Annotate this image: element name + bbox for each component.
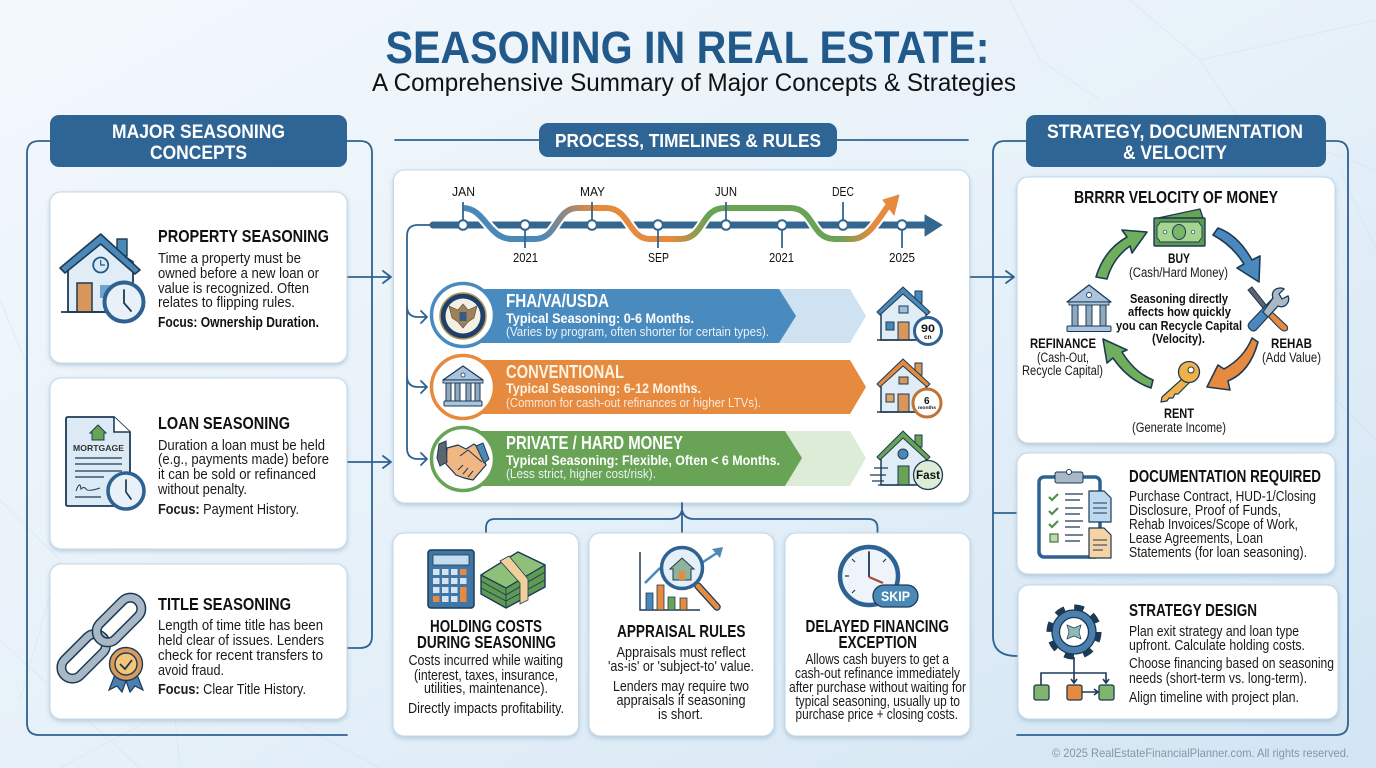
heading: process, timelines and rules: PROCESS, TIMELINES & RULES bbox=[555, 130, 821, 151]
text: property seasoning description: Focus: Ownership Duration. bbox=[158, 315, 319, 331]
text: velocity note: affects how quickly bbox=[1128, 304, 1232, 319]
row: FHA/VA/USDA bbox=[432, 284, 942, 346]
panel: property seasoning bbox=[50, 192, 347, 363]
text: loan seasoning description: without penalty. bbox=[157, 482, 247, 498]
heading: major seasoning concepts bbox=[50, 115, 347, 167]
icon: clock with skip badge: SKIP bbox=[881, 588, 910, 604]
heading: major seasoning concepts: CONCEPTS bbox=[150, 142, 247, 164]
arrow: refinance to buy bbox=[1096, 230, 1147, 279]
text: property seasoning description bbox=[158, 251, 319, 331]
text: documentation list: Lease Agreements, Loan bbox=[1129, 531, 1263, 547]
text: loan seasoning description: it can be sold or refinanced bbox=[158, 467, 316, 483]
text: loan seasoning description: Duration a loan must be held bbox=[158, 438, 325, 454]
icon: house with fast badge: Fast bbox=[916, 470, 940, 482]
text: loan seasoning description bbox=[157, 438, 329, 518]
text: delayed financing description bbox=[789, 652, 966, 723]
center header rule bbox=[395, 139, 968, 141]
row: conventional: Typical Seasoning: 6-12 Months. bbox=[506, 380, 701, 396]
text: property seasoning description: relates to flipping rules. bbox=[158, 295, 295, 311]
label: rent: RENT bbox=[1164, 405, 1194, 421]
text: title seasoning description: Length of time title has been bbox=[158, 618, 323, 634]
panel: holding costs: HOLDING COSTS bbox=[430, 616, 542, 636]
panel: appraisal rules: APPRAISAL RULES bbox=[617, 621, 746, 641]
text: strategy list: Align timeline with project plan. bbox=[1129, 690, 1299, 706]
panel: delayed financing exception: EXCEPTION bbox=[838, 632, 917, 652]
chart: seasoning timeline: 2025 bbox=[889, 251, 915, 265]
text: title seasoning description: held clear of issues. Lenders bbox=[158, 633, 324, 649]
panel: loan seasoning bbox=[50, 378, 347, 549]
text: appraisal rules description: is short. bbox=[658, 707, 703, 723]
chart: seasoning timeline: 2021 bbox=[769, 251, 794, 265]
panel: strategy design bbox=[1018, 585, 1338, 719]
panel: BRRRR velocity of money: BRRRR VELOCITY OF MONEY bbox=[1074, 187, 1278, 207]
chart: seasoning timeline bbox=[433, 185, 942, 265]
text: property seasoning description: value is recognized. Often bbox=[158, 281, 309, 297]
row: FHA/VA/USDA: FHA/VA/USDA bbox=[506, 291, 609, 311]
icon: house with 90-day badge: cn bbox=[924, 334, 932, 341]
label: refinance bbox=[1022, 335, 1103, 378]
icon: bank (refinance) bbox=[1067, 285, 1111, 332]
label: buy bbox=[1129, 250, 1228, 280]
icon: house with clock bbox=[60, 234, 144, 322]
text: loan seasoning description: Focus: Payment History. bbox=[158, 502, 299, 518]
icon: tools (rehab) bbox=[1248, 287, 1289, 331]
text: documentation list: Rehab Invoices/Scope of Work, bbox=[1129, 517, 1298, 533]
text: holding costs description bbox=[408, 653, 564, 717]
row: FHA/VA/USDA: (Varies by program, often shorter for certain types). bbox=[506, 324, 769, 339]
chart: seasoning timeline: JAN bbox=[452, 185, 475, 199]
panel: BRRRR velocity of money bbox=[1017, 177, 1335, 443]
arrow: rent to refinance bbox=[1103, 339, 1153, 388]
icon: house with fast badge bbox=[870, 431, 942, 490]
text: documentation list: Disclosure, Proof of Funds, bbox=[1129, 503, 1281, 519]
text: loan seasoning description: (e.g., payments made) before bbox=[158, 452, 329, 468]
panel: documentation required bbox=[1017, 453, 1335, 574]
row: conventional: CONVENTIONAL bbox=[506, 362, 624, 382]
heading: strategy, documentation and velocity: STRATEGY, DOCUMENTATION bbox=[1047, 121, 1303, 143]
text: documentation list: Purchase Contract, HUD-1/Closing bbox=[1129, 489, 1316, 505]
connector: timeline to loan rows bbox=[407, 225, 433, 465]
panel: property seasoning: PROPERTY SEASONING bbox=[158, 226, 329, 246]
text: title seasoning description: check for recent transfers to bbox=[158, 648, 323, 664]
text: title seasoning description bbox=[158, 618, 324, 698]
text: property seasoning description: owned before a new loan or bbox=[158, 266, 319, 282]
panel: title seasoning: TITLE SEASONING bbox=[158, 594, 291, 614]
text: appraisal rules description bbox=[608, 645, 754, 723]
label: refinance: (Cash-Out, bbox=[1037, 350, 1089, 365]
icon: calculator and cash bbox=[428, 550, 545, 608]
label: rehab: (Add Value) bbox=[1262, 350, 1321, 365]
label: refinance: REFINANCE bbox=[1030, 335, 1096, 351]
chart: seasoning timeline: DEC bbox=[832, 185, 854, 199]
icon: chain links with medal bbox=[57, 593, 146, 692]
text: title seasoning description: Focus: Clear Title History. bbox=[158, 682, 306, 698]
row: conventional: (Common for cash-out refinances or higher LTVs). bbox=[506, 395, 761, 410]
icon: clipboard and documents bbox=[1039, 470, 1111, 558]
text: velocity note bbox=[1116, 291, 1242, 346]
icon: clock with skip badge bbox=[840, 547, 918, 607]
connector: process to bottom cards bbox=[486, 503, 878, 533]
text: strategy list: Plan exit strategy and loan type bbox=[1129, 624, 1299, 640]
row: private / hard money: PRIVATE / HARD MONEY bbox=[506, 433, 683, 453]
text: velocity note: (Velocity). bbox=[1152, 331, 1205, 346]
panel: holding costs bbox=[393, 533, 578, 736]
icon: handshake bbox=[437, 441, 489, 480]
footer copyright: © 2025 RealEstateFinancialPlanner.com. All rights reserved. bbox=[1052, 746, 1349, 760]
icon: house with 6-month badge bbox=[877, 359, 941, 417]
panel: delayed financing exception: DELAYED FINANCING bbox=[806, 616, 949, 636]
row: FHA/VA/USDA: Typical Seasoning: 0-6 Months. bbox=[506, 310, 694, 326]
icon: magnifier over bar chart bbox=[640, 547, 723, 610]
heading: strategy, documentation and velocity: & VELOCITY bbox=[1123, 142, 1227, 164]
panel: title seasoning bbox=[50, 564, 347, 719]
text: strategy list: needs (short-term vs. long-term). bbox=[1129, 671, 1307, 687]
arrow: rehab to rent bbox=[1207, 338, 1258, 390]
connector arrow: process to strategy bbox=[970, 271, 1014, 283]
text: appraisal rules description: appraisals if seasoning bbox=[616, 693, 746, 709]
icon: government seal bbox=[440, 293, 486, 339]
text: velocity note: Seasoning directly bbox=[1130, 291, 1229, 306]
connector arrow: property seasoning to process bbox=[347, 271, 391, 283]
panel: holding costs: DURING SEASONING bbox=[417, 632, 556, 652]
label: rehab: REHAB bbox=[1271, 335, 1312, 351]
row: private / hard money: (Less strict, higher cost/risk). bbox=[506, 466, 656, 481]
connector lines: right column frame bbox=[993, 141, 1348, 735]
text: strategy list bbox=[1129, 624, 1334, 706]
icon: mortgage document with clock: MORTGAGE bbox=[73, 443, 124, 453]
icon: gear and flow chart bbox=[1034, 608, 1114, 700]
heading: major seasoning concepts: MAJOR SEASONING bbox=[112, 121, 285, 143]
text: holding costs description: Directly impacts profitability. bbox=[408, 701, 564, 717]
subtitle: A Comprehensive Summary of Major Concepts & Strategies bbox=[372, 69, 1016, 97]
row: private / hard money bbox=[432, 428, 942, 490]
icon: bank bbox=[443, 366, 483, 406]
panel: loan seasoning: LOAN SEASONING bbox=[158, 413, 290, 433]
text: appraisal rules description: 'as-is' or 'subject-to' value. bbox=[608, 659, 754, 675]
label: buy: (Cash/Hard Money) bbox=[1129, 265, 1228, 280]
icon: key (rent) bbox=[1161, 362, 1200, 402]
title: SEASONING IN REAL ESTATE: bbox=[386, 22, 990, 73]
heading: strategy, documentation and velocity bbox=[1026, 115, 1326, 167]
text: delayed financing description: Allows cash buyers to get a bbox=[806, 652, 950, 668]
icon: cash (buy) bbox=[1154, 209, 1205, 246]
chart: seasoning timeline: MAY bbox=[580, 185, 606, 199]
text: documentation list: Statements (for loan seasoning). bbox=[1129, 545, 1307, 561]
text: appraisal rules description: Lenders may require two bbox=[613, 679, 749, 695]
text: strategy list: upfront. Calculate holding costs. bbox=[1129, 638, 1305, 654]
text: holding costs description: (interest, taxes, insurance, bbox=[414, 668, 558, 684]
text: delayed financing description: cash-out refinance immediately bbox=[795, 666, 961, 682]
label: buy: BUY bbox=[1168, 250, 1190, 266]
icon: house with 6-month badge: 6 bbox=[924, 396, 930, 407]
label: rent bbox=[1132, 405, 1226, 435]
chart: seasoning timeline: 2021 bbox=[513, 251, 538, 265]
text: property seasoning description: Time a property must be bbox=[158, 251, 301, 267]
text: holding costs description: utilities, maintenance). bbox=[424, 681, 548, 697]
text: holding costs description: Costs incurred while waiting bbox=[408, 653, 563, 669]
panel: timeline and loan types bbox=[394, 170, 970, 503]
connector arrow: loan seasoning to process bbox=[347, 456, 391, 468]
icon: mortgage document with clock bbox=[66, 417, 144, 509]
text: documentation list bbox=[1129, 489, 1316, 561]
text: velocity note: you can Recycle Capital bbox=[1116, 318, 1242, 333]
text: delayed financing description: purchase price + closing costs. bbox=[796, 707, 958, 723]
icon: house with 90-day badge: 90 bbox=[921, 323, 935, 335]
panel: appraisal rules bbox=[589, 533, 774, 736]
chart: seasoning timeline: JUN bbox=[715, 185, 737, 199]
icon: house with 6-month badge: months bbox=[918, 405, 937, 410]
row: private / hard money: Typical Seasoning: Flexible, Often < 6 Months. bbox=[506, 452, 780, 468]
panel: delayed financing exception bbox=[785, 533, 970, 736]
label: refinance: Recycle Capital) bbox=[1022, 363, 1103, 378]
icon: house with 90-day badge bbox=[877, 287, 942, 344]
panel: strategy design: STRATEGY DESIGN bbox=[1129, 600, 1257, 620]
panel: documentation required: DOCUMENTATION REQUIRED bbox=[1129, 466, 1321, 486]
text: delayed financing description: typical seasoning, usually up to bbox=[796, 694, 960, 710]
arrow: buy to rehab bbox=[1213, 228, 1260, 282]
chart: seasoning timeline: SEP bbox=[648, 251, 669, 265]
text: appraisal rules description: Appraisals must reflect bbox=[616, 645, 746, 661]
row: conventional bbox=[432, 356, 941, 418]
heading: process, timelines and rules bbox=[539, 123, 837, 157]
connector lines: left column frame bbox=[27, 141, 372, 735]
text: strategy list: Choose financing based on seasoning bbox=[1129, 656, 1334, 672]
text: title seasoning description: avoid fraud. bbox=[158, 663, 224, 679]
label: rehab bbox=[1262, 335, 1321, 365]
label: rent: (Generate Income) bbox=[1132, 420, 1226, 435]
text: delayed financing description: after purchase without waiting for bbox=[789, 680, 966, 696]
